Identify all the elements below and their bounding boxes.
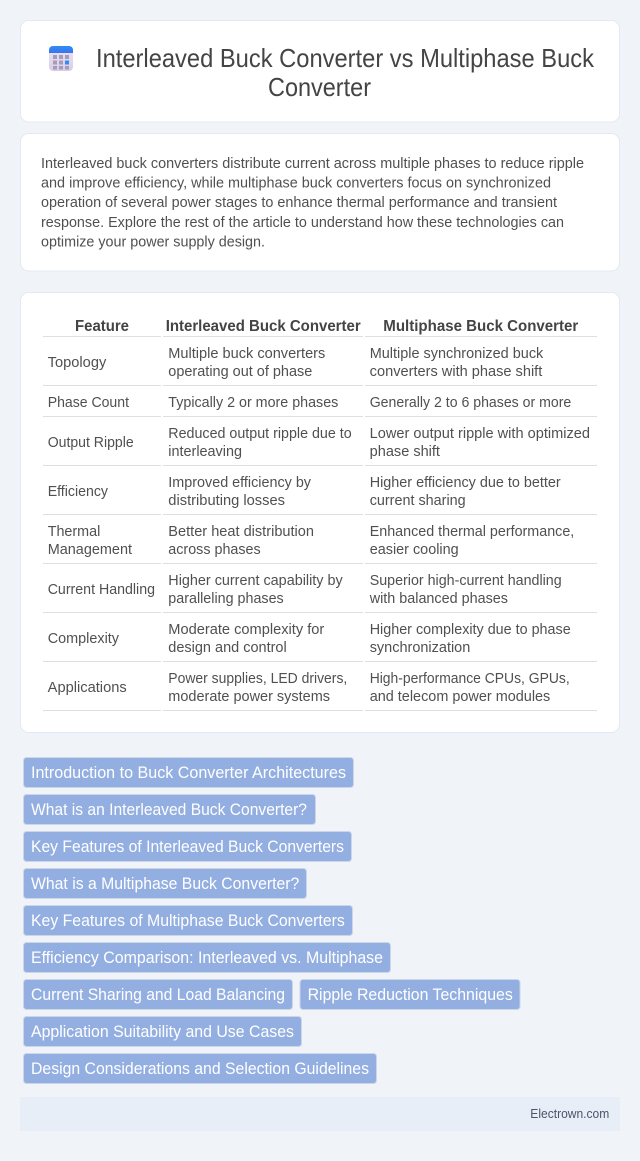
row: Thermal Management: across phases	[168, 542, 261, 558]
row: Complexity: Higher complexity due to phase	[370, 622, 571, 638]
row: Complexity: Moderate complexity for	[168, 622, 324, 638]
tag: Efficiency comparison: Efficiency Comparison: Interleaved vs. Multiphase	[31, 949, 383, 967]
row: Output Ripple: Reduced output ripple due to	[168, 426, 352, 442]
table header	[43, 318, 597, 337]
panel: comparison table	[20, 292, 620, 732]
row: Output Ripple: phase shift	[370, 444, 440, 460]
row: Applications: Applications	[48, 680, 127, 696]
tag: Design considerations: Design Considerations and Selection Guidelines	[31, 1060, 369, 1078]
row: Current Handling: Current Handling	[48, 582, 155, 598]
row: Applications	[43, 671, 597, 711]
title: Interleaved Buck Converter vs Multiphase Buck	[96, 43, 595, 73]
intro paragraph: Interleaved buck converters distribute current across multiple phases to reduce ripple	[41, 156, 584, 172]
row: Phase Count	[43, 395, 597, 417]
tag: Multiphase features: Key Features of Multiphase Buck Converters	[31, 912, 345, 930]
row: Topology: Topology	[48, 355, 107, 371]
tag: Multiphase definition: What is a Multiphase Buck Converter?	[31, 875, 299, 893]
row: Output Ripple: interleaving	[168, 444, 242, 460]
footer	[20, 1097, 620, 1131]
row: Efficiency: Improved efficiency by	[168, 475, 312, 491]
table header: Multiphase Buck Converter	[383, 318, 578, 335]
row: Complexity: Complexity	[48, 631, 120, 647]
row: Complexity: design and control	[168, 640, 287, 656]
row: Efficiency: distributing losses	[168, 493, 285, 509]
row: Applications: moderate power systems	[168, 689, 330, 705]
tag: Interleaved features: Key Features of Interleaved Buck Converters	[31, 838, 344, 856]
row: Thermal Management: Thermal	[48, 524, 100, 540]
row: Topology: operating out of phase	[168, 364, 312, 380]
row: Applications: Power supplies, LED drivers,	[168, 671, 347, 687]
row: Applications: High-performance CPUs, GPUs,	[370, 671, 570, 687]
panel: section tags	[24, 758, 520, 1084]
row: Topology: Multiple synchronized buck	[370, 346, 544, 362]
footer: Electrown.com	[530, 1107, 609, 1121]
row: Topology	[43, 346, 597, 386]
tag: Introduction	[24, 758, 354, 788]
tag: Introduction: Introduction to Buck Converter Architectures	[31, 764, 346, 782]
tag: Multiphase features	[24, 906, 352, 936]
row: Topology: converters with phase shift	[370, 364, 542, 380]
row: Phase Count: Generally 2 to 6 phases or more	[370, 395, 571, 411]
row: Current Handling: paralleling phases	[168, 591, 284, 607]
intro paragraph: optimize your power supply design.	[41, 234, 265, 250]
row: Applications: and telecom power modules	[370, 689, 550, 705]
title: Converter	[268, 72, 371, 102]
row: Efficiency: Efficiency	[48, 484, 109, 500]
row: Thermal Management	[43, 524, 597, 564]
row: Current Handling	[43, 573, 597, 613]
tag: Ripple reduction	[300, 980, 520, 1010]
tag: Design considerations	[24, 1054, 376, 1084]
tag: Application suitability	[24, 1016, 302, 1046]
table header: Interleaved Buck Converter	[166, 318, 361, 335]
row: Thermal Management: easier cooling	[370, 542, 459, 558]
row: Thermal Management: Better heat distribution	[168, 524, 314, 540]
row: Efficiency	[43, 475, 597, 515]
tag: Interleaved definition: What is an Interleaved Buck Converter?	[31, 801, 307, 819]
title	[96, 43, 595, 102]
row: Topology: Multiple buck converters	[168, 346, 325, 362]
intro paragraph: operation of several power stages to enhance thermal performance and transient	[41, 195, 557, 211]
tag: Efficiency comparison	[24, 942, 390, 972]
row: Phase Count: Typically 2 or more phases	[168, 395, 338, 411]
row: Current Handling: with balanced phases	[369, 591, 508, 607]
row: Output Ripple: Lower output ripple with optimized	[370, 426, 590, 442]
tag: Interleaved definition	[24, 794, 316, 824]
row: Complexity	[43, 622, 597, 662]
tag: Interleaved features	[24, 832, 352, 862]
panel: introduction	[20, 134, 620, 271]
intro paragraph	[41, 156, 584, 250]
row: Phase Count: Phase Count	[48, 395, 129, 411]
intro paragraph: response. Explore the rest of the article to understand how these technologies can	[41, 215, 564, 231]
row: Efficiency: Higher efficiency due to better	[370, 475, 561, 491]
tag: Ripple reduction: Ripple Reduction Techniques	[308, 986, 513, 1004]
row: Thermal Management: Management	[48, 542, 132, 558]
tag: Application suitability: Application Suitability and Use Cases	[31, 1023, 294, 1041]
tag: Current sharing	[24, 980, 292, 1010]
panel: title header	[20, 20, 620, 122]
row: Output Ripple	[43, 426, 597, 466]
row: Current Handling: Higher current capability by	[168, 573, 343, 589]
row: Thermal Management: Enhanced thermal performance,	[370, 524, 574, 540]
row: Output Ripple: Output Ripple	[48, 435, 134, 451]
row: Current Handling: Superior high-current handling	[370, 573, 562, 589]
table header: Feature	[75, 318, 129, 335]
row: Complexity: synchronization	[370, 640, 470, 656]
tag: Current sharing: Current Sharing and Load Balancing	[31, 986, 285, 1004]
tag: Multiphase definition	[24, 868, 306, 898]
intro paragraph: and improve efficiency, while multiphase buck converters focus on synchronized	[41, 176, 551, 192]
row: Efficiency: current sharing	[370, 493, 466, 509]
icon: calendar	[49, 46, 73, 71]
